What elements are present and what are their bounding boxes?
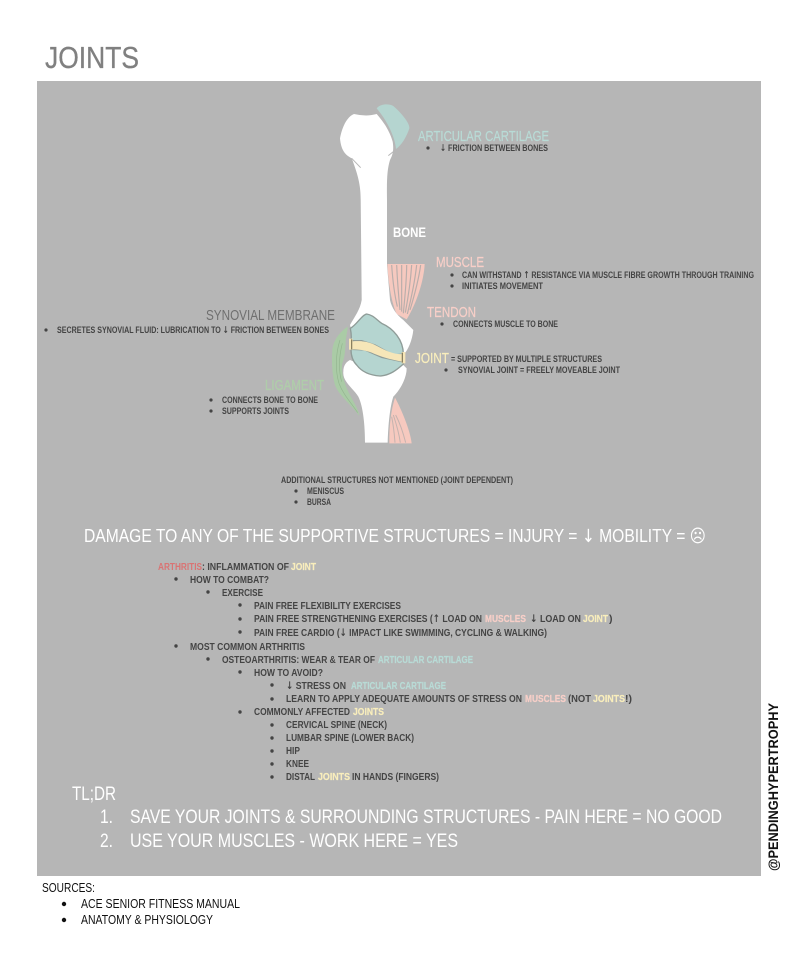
- text block: arthritis outline: [158, 561, 632, 783]
- arthritis heading: : INFLAMMATION OF: [202, 561, 289, 573]
- how to combat: PAIN FREE FLEXIBILITY EXERCISES: [254, 600, 401, 612]
- most common arthritis: JOINTS: [353, 706, 384, 718]
- label: ligament: LIGAMENT: [265, 377, 324, 394]
- most common arthritis: LEARN TO APPLY ADEQUATE AMOUNTS OF STRESS ON: [286, 693, 522, 705]
- label: muscle: [436, 254, 754, 292]
- text block: TL;DR: [72, 784, 722, 852]
- label: articular cartilage: ↓ FRICTION BETWEEN BONES: [440, 143, 548, 154]
- muscle upper: [387, 264, 425, 319]
- arthritis heading: [158, 561, 316, 573]
- text block: additional structures: MENISCUS: [307, 486, 344, 497]
- how to combat: PAIN FREE STRENGTHENING EXERCISES (↑ LOAD ON: [254, 613, 482, 625]
- how to combat: [174, 574, 613, 639]
- text block: additional structures: ADDITIONAL STRUCTURES NOT MENTIONED (JOINT DEPENDENT): [281, 475, 513, 486]
- text block: additional structures: BURSA: [307, 497, 331, 508]
- text block: additional structures: [281, 475, 513, 508]
- most common arthritis: IN HANDS (FINGERS): [352, 771, 439, 783]
- label: muscle: INITIATES MOVEMENT: [462, 281, 543, 292]
- most common arthritis: ARTICULAR CARTILAGE: [351, 680, 446, 692]
- bone: tibia: [343, 360, 407, 443]
- articular cartilage cap: [377, 104, 409, 149]
- text block: TL;DR: 1.: [100, 807, 113, 828]
- label: joint: JOINT: [415, 350, 449, 367]
- most common arthritis: HOW TO AVOID?: [254, 667, 323, 679]
- cartilage lower: [351, 349, 403, 376]
- most common arthritis: CERVICAL SPINE (NECK): [286, 719, 387, 731]
- cartilage upper: [350, 314, 403, 355]
- most common arthritis: [174, 641, 632, 783]
- text block: sources: ANATOMY & PHYSIOLOGY: [81, 912, 213, 927]
- how to combat: EXERCISE: [222, 587, 263, 599]
- label: synovial membrane: SECRETES SYNOVIAL FLUID: LUBRICATION TO ↓ FRICTION BETWEEN BONES: [57, 325, 329, 336]
- muscle lower: [389, 398, 412, 443]
- most common arthritis: COMMONLY AFFECTED: [254, 706, 350, 718]
- arthritis heading: JOINT: [291, 561, 316, 573]
- diagram: knee joint anatomy: [332, 104, 425, 443]
- label: joint: = SUPPORTED BY MULTIPLE STRUCTURES: [451, 354, 602, 365]
- label: articular cartilage: [418, 128, 549, 154]
- how to combat: JOINT: [583, 613, 608, 625]
- text block: TL;DR: TL;DR: [72, 784, 116, 805]
- label: joint: [415, 350, 620, 376]
- most common arthritis: JOINTS: [318, 771, 350, 783]
- label: tendon: [427, 304, 558, 330]
- how to combat: PAIN FREE CARDIO (↓ IMPACT LIKE SWIMMING, CYCLING & WALKING): [254, 627, 547, 639]
- arthritis heading: ARTHRITIS: [158, 561, 202, 573]
- text block: sources: [42, 880, 240, 927]
- text block: TL;DR: 2.: [100, 831, 113, 852]
- most common arthritis: LUMBAR SPINE (LOWER BACK): [286, 732, 414, 744]
- label: synovial membrane: [44, 307, 335, 336]
- most common arthritis: DISTAL: [286, 771, 315, 783]
- label: ligament: [209, 377, 324, 417]
- title: JOINTS: [45, 40, 139, 75]
- most common arthritis: OSTEOARTHRITIS: WEAR & TEAR OF: [222, 654, 375, 666]
- most common arthritis: ↓ STRESS ON: [286, 680, 346, 692]
- how to combat: MUSCLES: [485, 613, 526, 625]
- ligament: [332, 327, 359, 416]
- bone detail lines: [352, 152, 393, 168]
- most common arthritis: ARTICULAR CARTILAGE: [378, 654, 473, 666]
- synovial fluid joint space: [349, 339, 405, 363]
- most common arthritis: KNEE: [286, 758, 309, 770]
- panel: main grey background: [37, 81, 761, 876]
- label: joint: SYNOVIAL JOINT = FREELY MOVEABLE JOINT: [458, 365, 620, 376]
- label: ligament: SUPPORTS JOINTS: [222, 406, 289, 417]
- label: tendon: TENDON: [427, 304, 476, 321]
- how to combat: ↓ LOAD ON: [530, 613, 581, 625]
- most common arthritis: MOST COMMON ARTHRITIS: [190, 641, 305, 653]
- most common arthritis: !): [625, 693, 632, 705]
- credit handle (rotated): @PENDINGHYPERTROPHY: [765, 702, 781, 871]
- bone: femur: [340, 114, 413, 355]
- how to combat: ): [609, 613, 612, 625]
- most common arthritis: MUSCLES: [525, 693, 566, 705]
- label: ligament: CONNECTS BONE TO BONE: [222, 395, 318, 406]
- most common arthritis: JOINTS: [593, 693, 625, 705]
- label: muscle: MUSCLE: [436, 254, 484, 271]
- label: synovial membrane: SYNOVIAL MEMBRANE: [206, 307, 335, 324]
- label: tendon: CONNECTS MUSCLE TO BONE: [453, 319, 558, 330]
- most common arthritis: (NOT: [568, 693, 592, 705]
- label: bone: BONE: [393, 224, 426, 240]
- text block: TL;DR: USE YOUR MUSCLES - WORK HERE = YES: [130, 831, 458, 852]
- most common arthritis: HIP: [286, 745, 300, 757]
- label: articular cartilage: ARTICULAR CARTILAGE: [418, 128, 549, 145]
- text block: sources: SOURCES:: [42, 880, 95, 895]
- text block: sources: ACE SENIOR FITNESS MANUAL: [81, 896, 240, 911]
- callout: damage statement: DAMAGE TO ANY OF THE SUPPORTIVE STRUCTURES = INJURY = ↓ MOBILITY = ☹: [84, 526, 706, 547]
- how to combat: HOW TO COMBAT?: [190, 574, 269, 586]
